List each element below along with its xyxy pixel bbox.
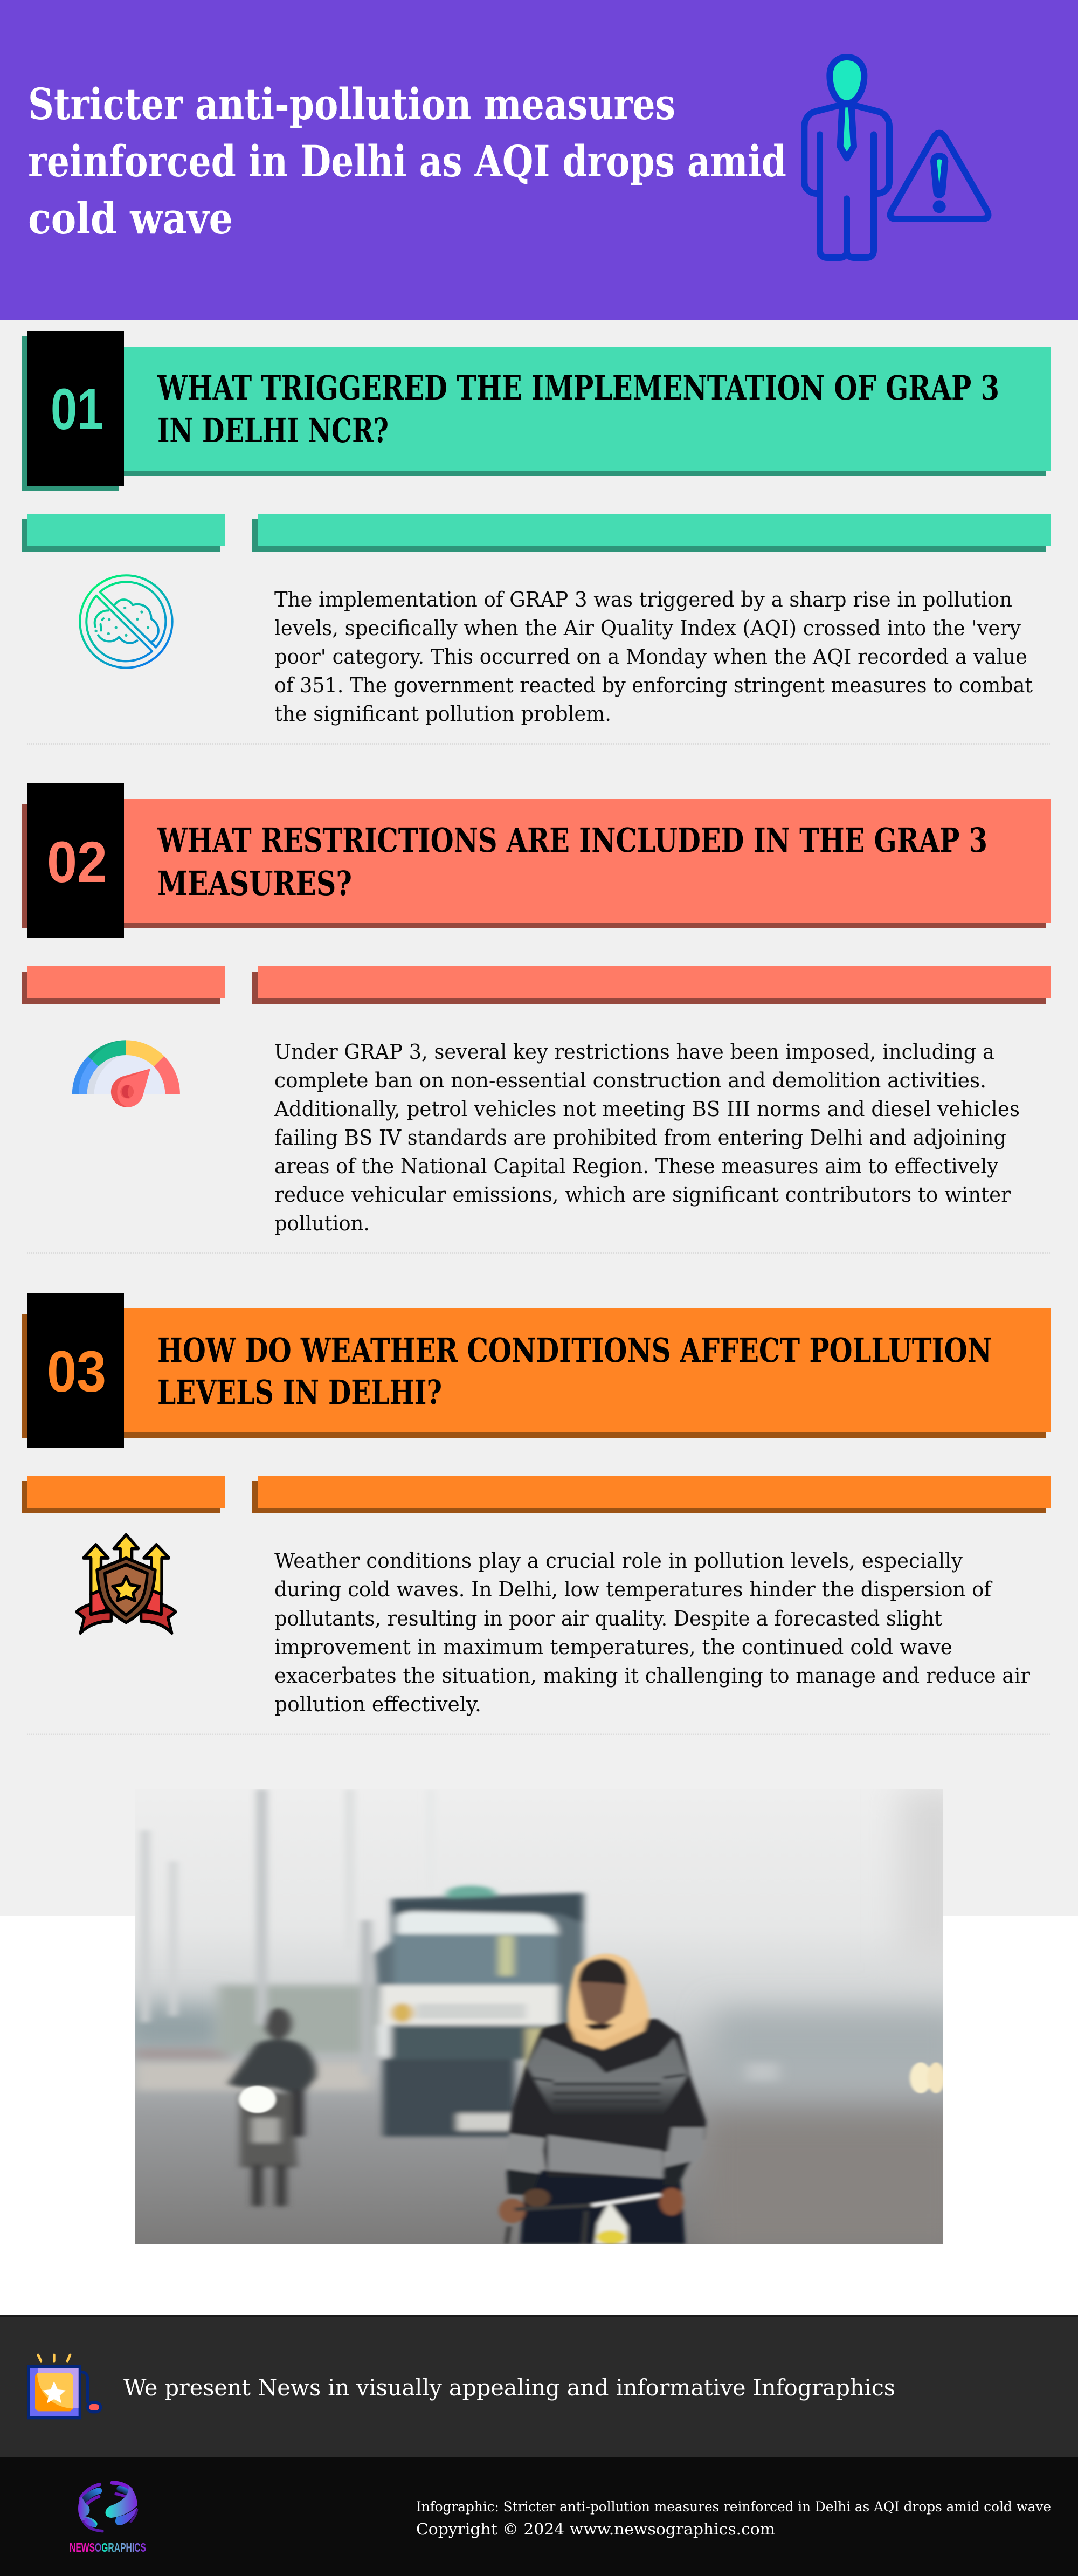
- tagline text: We present News in visually appealing and informative Infographics: [123, 2374, 895, 2401]
- heading banner 02: 02: [47, 829, 107, 894]
- subheader bars 02: [22, 966, 1051, 1004]
- body text 01: of 351. The government reacted by enforcing stringent measures to combat: [274, 673, 1033, 697]
- panel: footer: [0, 2457, 1078, 2576]
- heading banner 03: [22, 1293, 1051, 1448]
- motorcyclist: [265, 2008, 292, 2039]
- body text 02: areas of the National Capital Region. These measures aim to effectively: [274, 1154, 999, 1178]
- body text 01: [274, 588, 1033, 726]
- panel: section 01: [22, 331, 1051, 744]
- body text 01: poor' category. This occurred on a Monday when the AQI recorded a value: [274, 645, 1027, 669]
- icon: air quality gauge: [72, 1040, 180, 1107]
- credit text: [416, 2499, 1051, 2538]
- cyclist: [499, 1954, 706, 2244]
- body text 01: levels, specifically when the Air Quality Index (AQI) crossed into the 'very: [274, 616, 1021, 640]
- body text 03: during cold waves. In Delhi, low temperatures hinder the dispersion of: [274, 1578, 993, 1601]
- icon: no pollution cloud: [80, 575, 172, 668]
- title: Stricter anti-pollution measures: [28, 79, 675, 129]
- body text 01: the significant pollution problem.: [274, 702, 611, 726]
- body text 03: Weather conditions play a crucial role in pollution levels, especially: [274, 1549, 963, 1573]
- heading banner 03: 03: [47, 1339, 106, 1404]
- truck: [375, 1893, 584, 2047]
- panel: section 03: [22, 1293, 1051, 1734]
- panel: header: [0, 0, 1078, 320]
- body text 01: The implementation of GRAP 3 was triggered by a sharp rise in pollution: [274, 588, 1012, 611]
- body text 02: failing BS IV standards are prohibited from entering Delhi and adjoining: [274, 1126, 1006, 1149]
- body text 03: [274, 1549, 1031, 1716]
- icon: businessman with warning sign: [804, 57, 989, 258]
- body text 03: exacerbates the situation, making it challenging to manage and reduce air: [274, 1664, 1031, 1688]
- body text 02: [274, 1040, 1020, 1235]
- body text 02: pollution.: [274, 1211, 370, 1235]
- subheader bars 03: [22, 1476, 1051, 1513]
- body text 02: reduce vehicular emissions, which are significant contributors to winter: [274, 1183, 1011, 1207]
- heading banner 02: [22, 783, 1051, 938]
- panel: section 02: [22, 783, 1051, 1253]
- icon: framed star: [29, 2355, 101, 2418]
- heading banner 01: 01: [51, 376, 103, 442]
- logo: Newsographics: [70, 2483, 146, 2554]
- subheader bars 01: [22, 514, 1051, 552]
- logo: Newsographics: NEWSOGRAPHICS: [70, 2540, 146, 2554]
- photo: cyclist and traffic in smog: [119, 1789, 966, 2251]
- title: [28, 79, 786, 244]
- credit text: Copyright © 2024 www.newsographics.com: [416, 2520, 775, 2538]
- body text 02: Under GRAP 3, several key restrictions have been imposed, including a: [274, 1040, 994, 1064]
- credit text: Infographic: Stricter anti-pollution measures reinforced in Delhi as AQI drops amid cold wave: [416, 2499, 1051, 2515]
- body text 03: improvement in maximum temperatures, the continued cold wave: [274, 1635, 952, 1659]
- body text 02: Additionally, petrol vehicles not meeting BS III norms and diesel vehicles: [274, 1097, 1020, 1121]
- heading banner 02: MEASURES?: [157, 864, 352, 903]
- panel: tagline band: [0, 2315, 1078, 2457]
- icon: shield with arrows and ribbon: [77, 1535, 176, 1633]
- body text 02: complete ban on non-essential construction and demolition activities.: [274, 1069, 986, 1092]
- heading banner 03: LEVELS IN DELHI?: [157, 1373, 442, 1412]
- title: cold wave: [28, 193, 233, 244]
- title: reinforced in Delhi as AQI drops amid: [28, 136, 786, 187]
- heading banner 01: IN DELHI NCR?: [157, 411, 389, 450]
- heading banner 01: [22, 331, 1051, 491]
- body text 03: pollution effectively.: [274, 1692, 481, 1716]
- body text 03: pollutants, resulting in poor air quality. Despite a forecasted slight: [274, 1607, 942, 1630]
